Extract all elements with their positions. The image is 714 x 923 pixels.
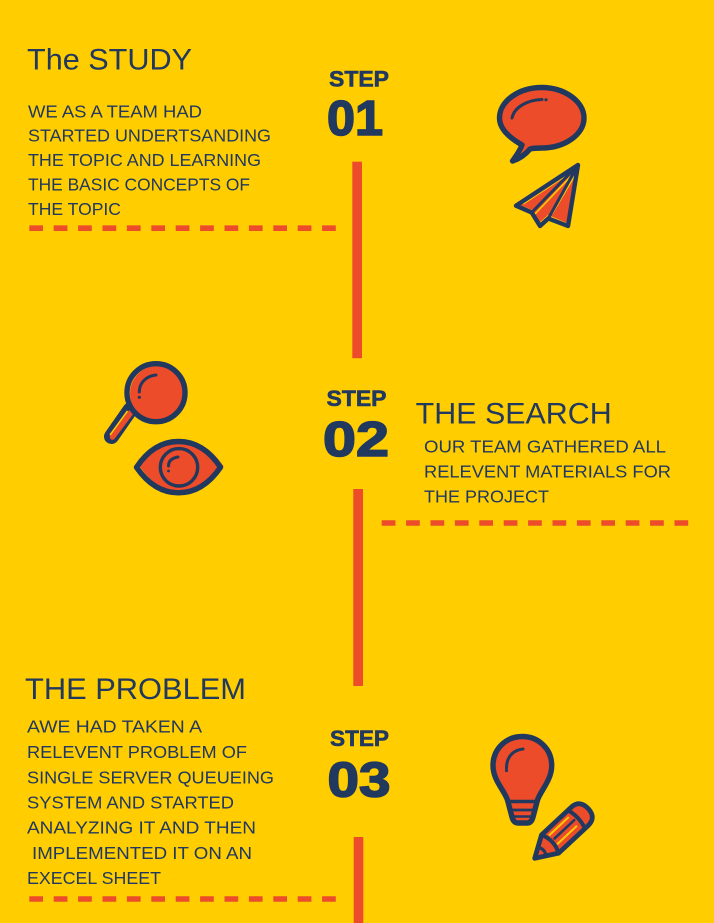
dashed divider: step 3 <box>29 896 336 902</box>
text block: study description: STARTED UNDERTSANDING <box>28 126 271 146</box>
step label: 03: STEP <box>330 726 389 751</box>
text block: study description: THE BASIC CONCEPTS OF <box>28 174 250 194</box>
text block: study description: THE TOPIC AND LEARNING <box>28 150 261 170</box>
step label: 03: 03 <box>328 754 390 808</box>
panel: step 1 <box>27 44 586 358</box>
heading: THE SEARCH: THE SEARCH <box>416 398 612 430</box>
dashed divider: step 1 <box>29 225 336 231</box>
text block: problem description: SYSTEM AND STARTED <box>27 793 234 813</box>
text block: problem description <box>27 717 274 888</box>
text block: study description: WE AS A TEAM HAD <box>28 102 202 122</box>
text block: problem description: SINGLE SERVER QUEUEING <box>27 767 274 787</box>
step label: 03 <box>328 726 390 808</box>
text block: search description: OUR TEAM GATHERED ALL <box>424 437 666 457</box>
text block: study description: THE TOPIC <box>28 199 121 219</box>
timeline bar: step 2 <box>353 489 363 686</box>
icon: magnifying glass <box>110 364 186 437</box>
icon: eye <box>136 440 224 493</box>
text block: problem description: AWE HAD TAKEN A <box>27 717 202 737</box>
text block: problem description: EXECEL SHEET <box>27 868 161 888</box>
icon: paper plane <box>516 165 578 226</box>
panel: step 3 <box>25 673 597 923</box>
heading: THE PROBLEM: THE PROBLEM <box>25 673 246 706</box>
panel: step 2 <box>110 364 689 686</box>
text block: problem description: RELEVENT PROBLEM OF <box>27 742 247 762</box>
step label: 01: STEP <box>329 67 389 92</box>
step label: 02: STEP <box>326 386 386 411</box>
step label: 01: 01 <box>327 92 383 146</box>
text block: problem description: ANALYZING IT AND THEN <box>27 818 256 838</box>
step label: 02 <box>323 386 389 467</box>
timeline bar: step 3 <box>354 837 363 923</box>
icon: pencil <box>526 799 597 867</box>
dashed divider: step 2 <box>382 520 689 526</box>
icon: light bulb <box>493 736 554 824</box>
step label: 01 <box>327 67 389 146</box>
text block: search description <box>424 437 671 507</box>
timeline bar: step 1 <box>352 162 362 358</box>
heading: The STUDY: The STUDY <box>27 44 192 76</box>
text block: search description: THE PROJECT <box>424 487 549 507</box>
step label: 02: 02 <box>323 413 389 467</box>
icon: speech bubble <box>500 88 586 162</box>
text block: study description <box>28 102 271 219</box>
text block: problem description: IMPLEMENTED IT ON AN <box>32 843 252 863</box>
text block: search description: RELEVENT MATERIALS FOR <box>424 462 671 482</box>
